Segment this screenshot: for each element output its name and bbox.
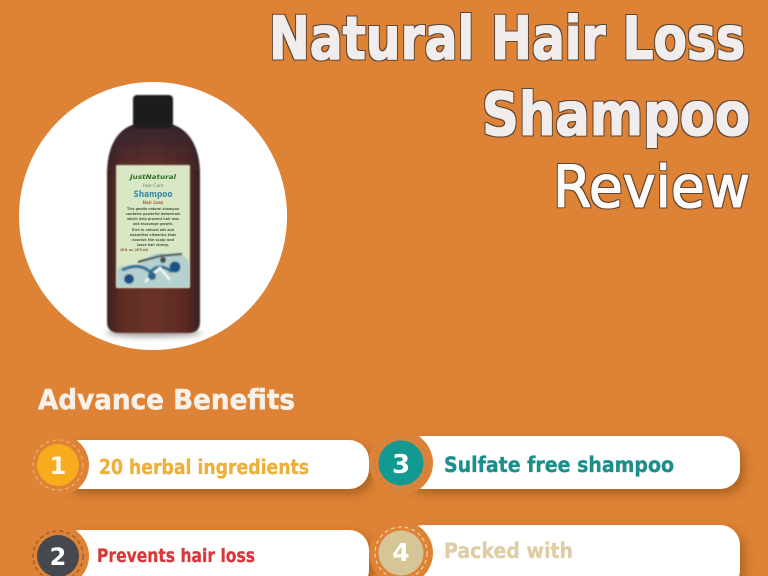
product label: JustNatural bbox=[128, 173, 177, 181]
product label bbox=[116, 165, 190, 288]
benefit 2: 2 bbox=[50, 543, 66, 571]
product label: This gentle natural shampoo bbox=[127, 207, 179, 211]
title: Review bbox=[553, 153, 750, 221]
product label: Hair Care bbox=[142, 183, 164, 189]
benefit 1: 1 bbox=[50, 452, 66, 480]
product label: which help prevent hair loss bbox=[127, 217, 179, 221]
benefit 4: Packed with bbox=[444, 539, 573, 563]
product label: Hair Loss bbox=[143, 200, 164, 205]
benefit 2 bbox=[27, 525, 369, 576]
benefit 4 bbox=[369, 521, 740, 576]
product label: nourish the scalp and bbox=[132, 238, 174, 242]
benefit 3: 3 bbox=[392, 450, 410, 480]
title bbox=[269, 4, 750, 221]
product label: and encourage growth. bbox=[133, 222, 173, 226]
product label: Shampoo bbox=[134, 190, 173, 200]
icon: shampoo bottle bbox=[106, 95, 202, 337]
product label: leave hair strong. bbox=[137, 243, 169, 247]
product label: 16 fl. oz. (473 ml) bbox=[120, 248, 148, 252]
benefit 4: 4 bbox=[392, 538, 410, 567]
benefit 1: 20 herbal ingredients bbox=[99, 455, 309, 479]
product image circle bbox=[19, 82, 287, 350]
benefit 2: Prevents hair loss bbox=[97, 545, 255, 567]
benefit 3: Sulfate free shampoo bbox=[444, 453, 674, 477]
benefit 3 bbox=[369, 431, 740, 495]
benefit 1 bbox=[27, 434, 369, 496]
product label: essential vitamins that bbox=[130, 233, 176, 237]
product label: Rich in natural oils and bbox=[132, 228, 174, 232]
product label: contains powerful botanicals bbox=[126, 212, 180, 216]
heading: Advance Benefits: Advance Benefits bbox=[38, 383, 295, 416]
